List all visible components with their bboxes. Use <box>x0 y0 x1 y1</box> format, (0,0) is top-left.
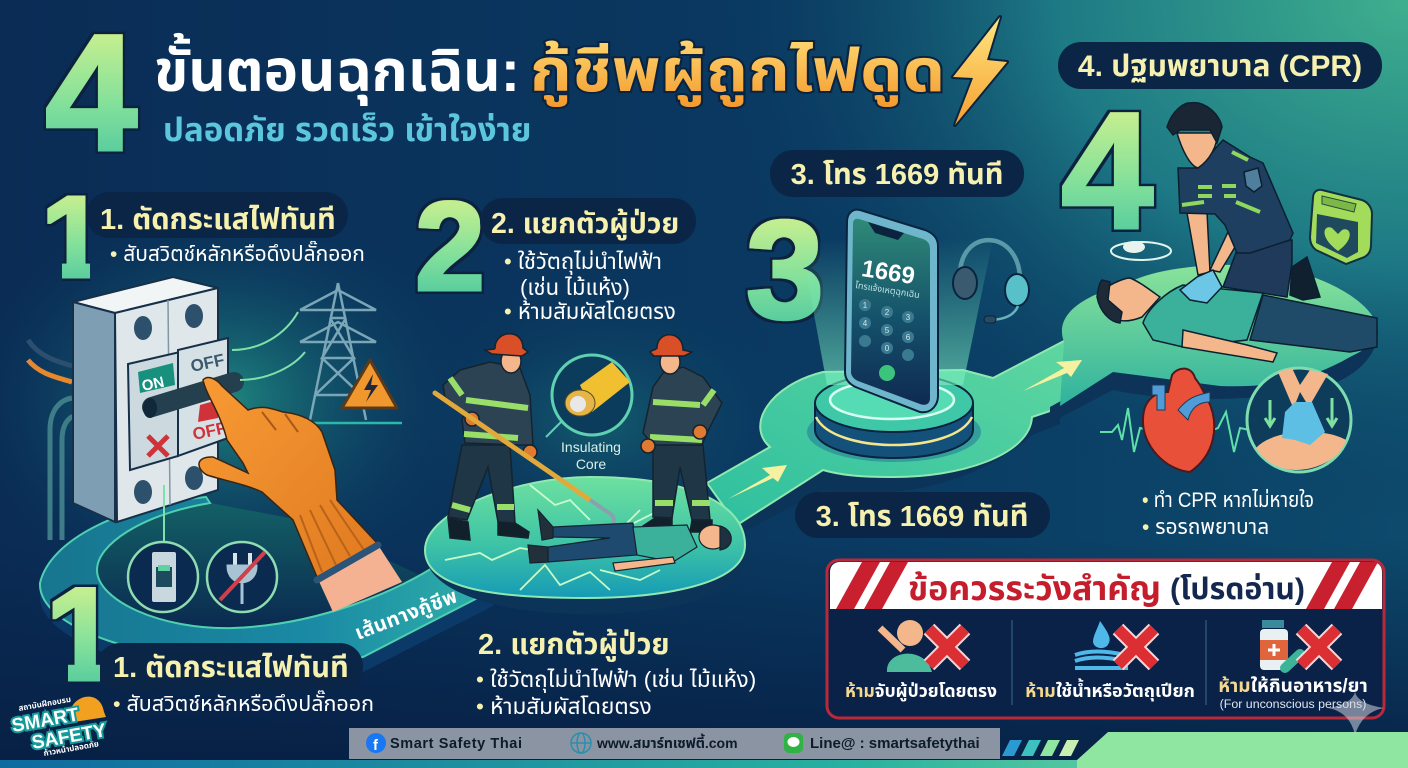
warning label 1: ห้ามจับผู้ป่วยโดยตรง <box>845 681 997 702</box>
pill 3 <box>770 150 1024 197</box>
panel: step 3 <box>746 150 1024 348</box>
bullet lower 1: • สับสวิตช์หลักหรือดึงปลั๊กออก <box>113 690 374 716</box>
gloves <box>1180 270 1222 303</box>
pill 4 <box>1058 42 1382 89</box>
platform 4 <box>1060 265 1377 406</box>
phone body: โทรแจ้งเหตุฉุกเฉิน <box>855 280 920 300</box>
panel: warning: (For unconscious persons) <box>1220 697 1366 711</box>
phone body: 5 <box>885 326 890 335</box>
step 3 lower pill <box>795 492 1050 538</box>
cracks <box>445 485 660 590</box>
phone body: 3 <box>906 313 911 322</box>
warning icon 1 <box>880 620 965 672</box>
heading lower 2: 2. แยกตัวผู้ป่วย <box>478 629 669 662</box>
route path and platforms <box>40 265 1378 677</box>
phone notch <box>868 222 904 240</box>
number 2: 2 <box>415 176 485 317</box>
warning label 2: ห้ามใช้น้ำหรือวัตถุเปียก <box>1025 678 1195 702</box>
main title group <box>45 1 1007 186</box>
light beam <box>800 238 993 385</box>
icon: facebook <box>366 733 386 754</box>
logo: smart safety: SMART <box>10 704 81 737</box>
warning icon 2 <box>1075 621 1154 668</box>
footer contact bar <box>349 728 1000 759</box>
figure: firefighter right <box>641 335 722 532</box>
phone body: 1669 <box>860 255 917 290</box>
icon: headset <box>953 240 1029 323</box>
warning stripes <box>836 562 1378 609</box>
warning title: ข้อควรระวังสำคัญ <box>908 570 1161 608</box>
pill 2 <box>480 198 696 244</box>
phone body <box>845 210 938 412</box>
panel: warning <box>827 560 1384 718</box>
icon: globe <box>571 733 591 753</box>
number 1 lower: 1 <box>45 561 119 709</box>
figure: insulated pole circle <box>546 355 632 472</box>
figure: medic <box>1167 103 1320 300</box>
step 4 bullets: • รอรถพยาบาล <box>1142 516 1269 539</box>
icon: breaker switch: ON <box>140 374 166 395</box>
bullets 2: • ใช้วัตถุไม่นำไฟฟ้า <box>504 249 662 275</box>
icon: line <box>784 733 803 753</box>
figure: CPR patient <box>1097 270 1377 362</box>
panel: step 1 lower <box>50 584 372 711</box>
step 1 pill <box>86 192 348 238</box>
icon: power tower <box>300 283 402 423</box>
heading 2: 2. แยกตัวผู้ป่วย <box>491 208 679 241</box>
number 3: 3 <box>746 191 824 348</box>
warning icon 3 <box>1260 620 1337 670</box>
number 4 right: 4 <box>1061 79 1153 264</box>
medic head <box>1177 133 1217 168</box>
heading 4: 4. ปฐมพยาบาล (CPR) <box>1078 50 1362 83</box>
platform 3 extrusion <box>743 407 1060 532</box>
phone body: 4 <box>863 319 868 328</box>
platform 2 extrusion <box>425 540 745 614</box>
icon: wires left of breaker <box>28 340 74 540</box>
band to platform 3 <box>707 340 1066 525</box>
logo: smart safety: สถาบันฝึกอบรม <box>18 694 72 713</box>
heading lower 1: 1. ตัดกระแสไฟทันที <box>113 652 349 684</box>
figure: firefighter left <box>443 334 537 540</box>
logo: smart safety: ก้าวหน้าปลอดภัย <box>43 738 99 758</box>
facebook text: Smart Safety Thai <box>390 736 522 752</box>
panel: warning: (โปรดอ่าน) <box>1170 573 1305 606</box>
keypad <box>859 299 914 361</box>
icon: gloved hand <box>199 378 402 612</box>
platform 4 extrusion <box>1050 330 1378 423</box>
logo: smart safety <box>10 694 108 758</box>
medic arms <box>1187 212 1210 275</box>
pill lower 1 <box>97 643 363 690</box>
footer right green <box>1077 732 1408 768</box>
route label: เส้นทางกู้ชีพ <box>352 585 461 645</box>
pedestal <box>807 374 981 462</box>
step 1 heading: 1. ตัดกระแสไฟทันที <box>100 204 336 236</box>
insulating core label: Insulating <box>561 439 621 455</box>
icon: warning triangle <box>342 360 397 408</box>
heading 3: 3. โทร 1669 ทันที <box>791 159 1003 191</box>
heading lower 3: 3. โทร 1669 ทันที <box>816 501 1028 533</box>
subtitle: ปลอดภัย รวดเร็ว เข้าใจง่าย <box>163 111 531 148</box>
icon: switch circle <box>128 542 198 612</box>
icon: compression circle <box>1247 368 1351 472</box>
icon: mask <box>1111 241 1171 260</box>
line text: Line@ : smartsafetythai <box>810 735 980 752</box>
icon: breaker switch: OFF <box>189 350 226 376</box>
panel: step 4 <box>1058 42 1382 264</box>
icon: AED <box>1310 190 1372 264</box>
panel: step 2 lower <box>476 629 756 719</box>
title orange: กู้ชีพผู้ถูกไฟดูด <box>530 37 945 107</box>
icon: heart and ECG <box>1100 369 1250 472</box>
phone body: 2 <box>885 308 890 317</box>
medic boot <box>1290 257 1320 300</box>
sparkle <box>1328 692 1384 735</box>
platform 1 ring and band <box>40 497 493 662</box>
warning label 3: ห้ามให้กินอาหาร/ยา <box>1218 675 1368 697</box>
phone body: 6 <box>906 333 911 342</box>
warning header <box>830 562 1382 609</box>
step 4 bullets: • ทำ CPR หากไม่หายใจ <box>1142 488 1314 512</box>
number 1: 1 <box>41 172 106 302</box>
wires to tower <box>164 312 305 542</box>
medic trousers <box>1223 240 1292 297</box>
medic shirt <box>1178 140 1293 253</box>
website text: www.สมาร์ทเซฟตี้.com <box>596 733 738 751</box>
phone body: 0 <box>885 344 890 353</box>
arrow 2 <box>1023 360 1082 391</box>
platform 2 <box>425 477 745 598</box>
title white: ขั้นตอนฉุกเฉิน: <box>154 32 520 106</box>
figure: rescue pole <box>435 393 614 526</box>
platform 1 extrusion <box>40 583 493 677</box>
bullets 2: (เช่น ไม้แห้ง) <box>520 275 630 300</box>
figure: insulated pole circle: Core <box>576 456 606 472</box>
icon: phone on pedestal <box>800 210 993 462</box>
bullets 2: • ห้ามสัมผัสโดยตรง <box>504 299 676 324</box>
step 4 bullets <box>1142 488 1314 539</box>
bullet lower 2b: • ห้ามสัมผัสโดยตรง <box>476 694 652 719</box>
big number 4: 4 <box>45 1 137 186</box>
footer stripes <box>1002 740 1079 756</box>
footer strip <box>0 692 1408 768</box>
bullet lower 2a: • ใช้วัตถุไม่นำไฟฟ้า (เช่น ไม้แห้ง) <box>476 667 756 693</box>
bullets 2 <box>504 249 676 324</box>
panel: step 1 <box>45 192 364 281</box>
icon: breaker switch <box>73 277 234 522</box>
icon: no plug circle <box>207 542 277 612</box>
arrow 1 <box>728 465 787 499</box>
platform 1 inner dark <box>97 503 420 628</box>
logo: smart safety: SAFETY <box>30 720 108 754</box>
figure: victim on platform 2 <box>528 510 731 571</box>
panel: step 2 <box>415 176 696 324</box>
icon: breaker switch: OFF <box>191 418 228 444</box>
icon: facebook: f <box>373 737 379 754</box>
step 1 bullet: • สับสวิตช์หลักหรือดึงปลั๊กออก <box>110 240 365 266</box>
icon: lightning bolt <box>953 17 1007 125</box>
phone body: 1 <box>863 301 868 310</box>
